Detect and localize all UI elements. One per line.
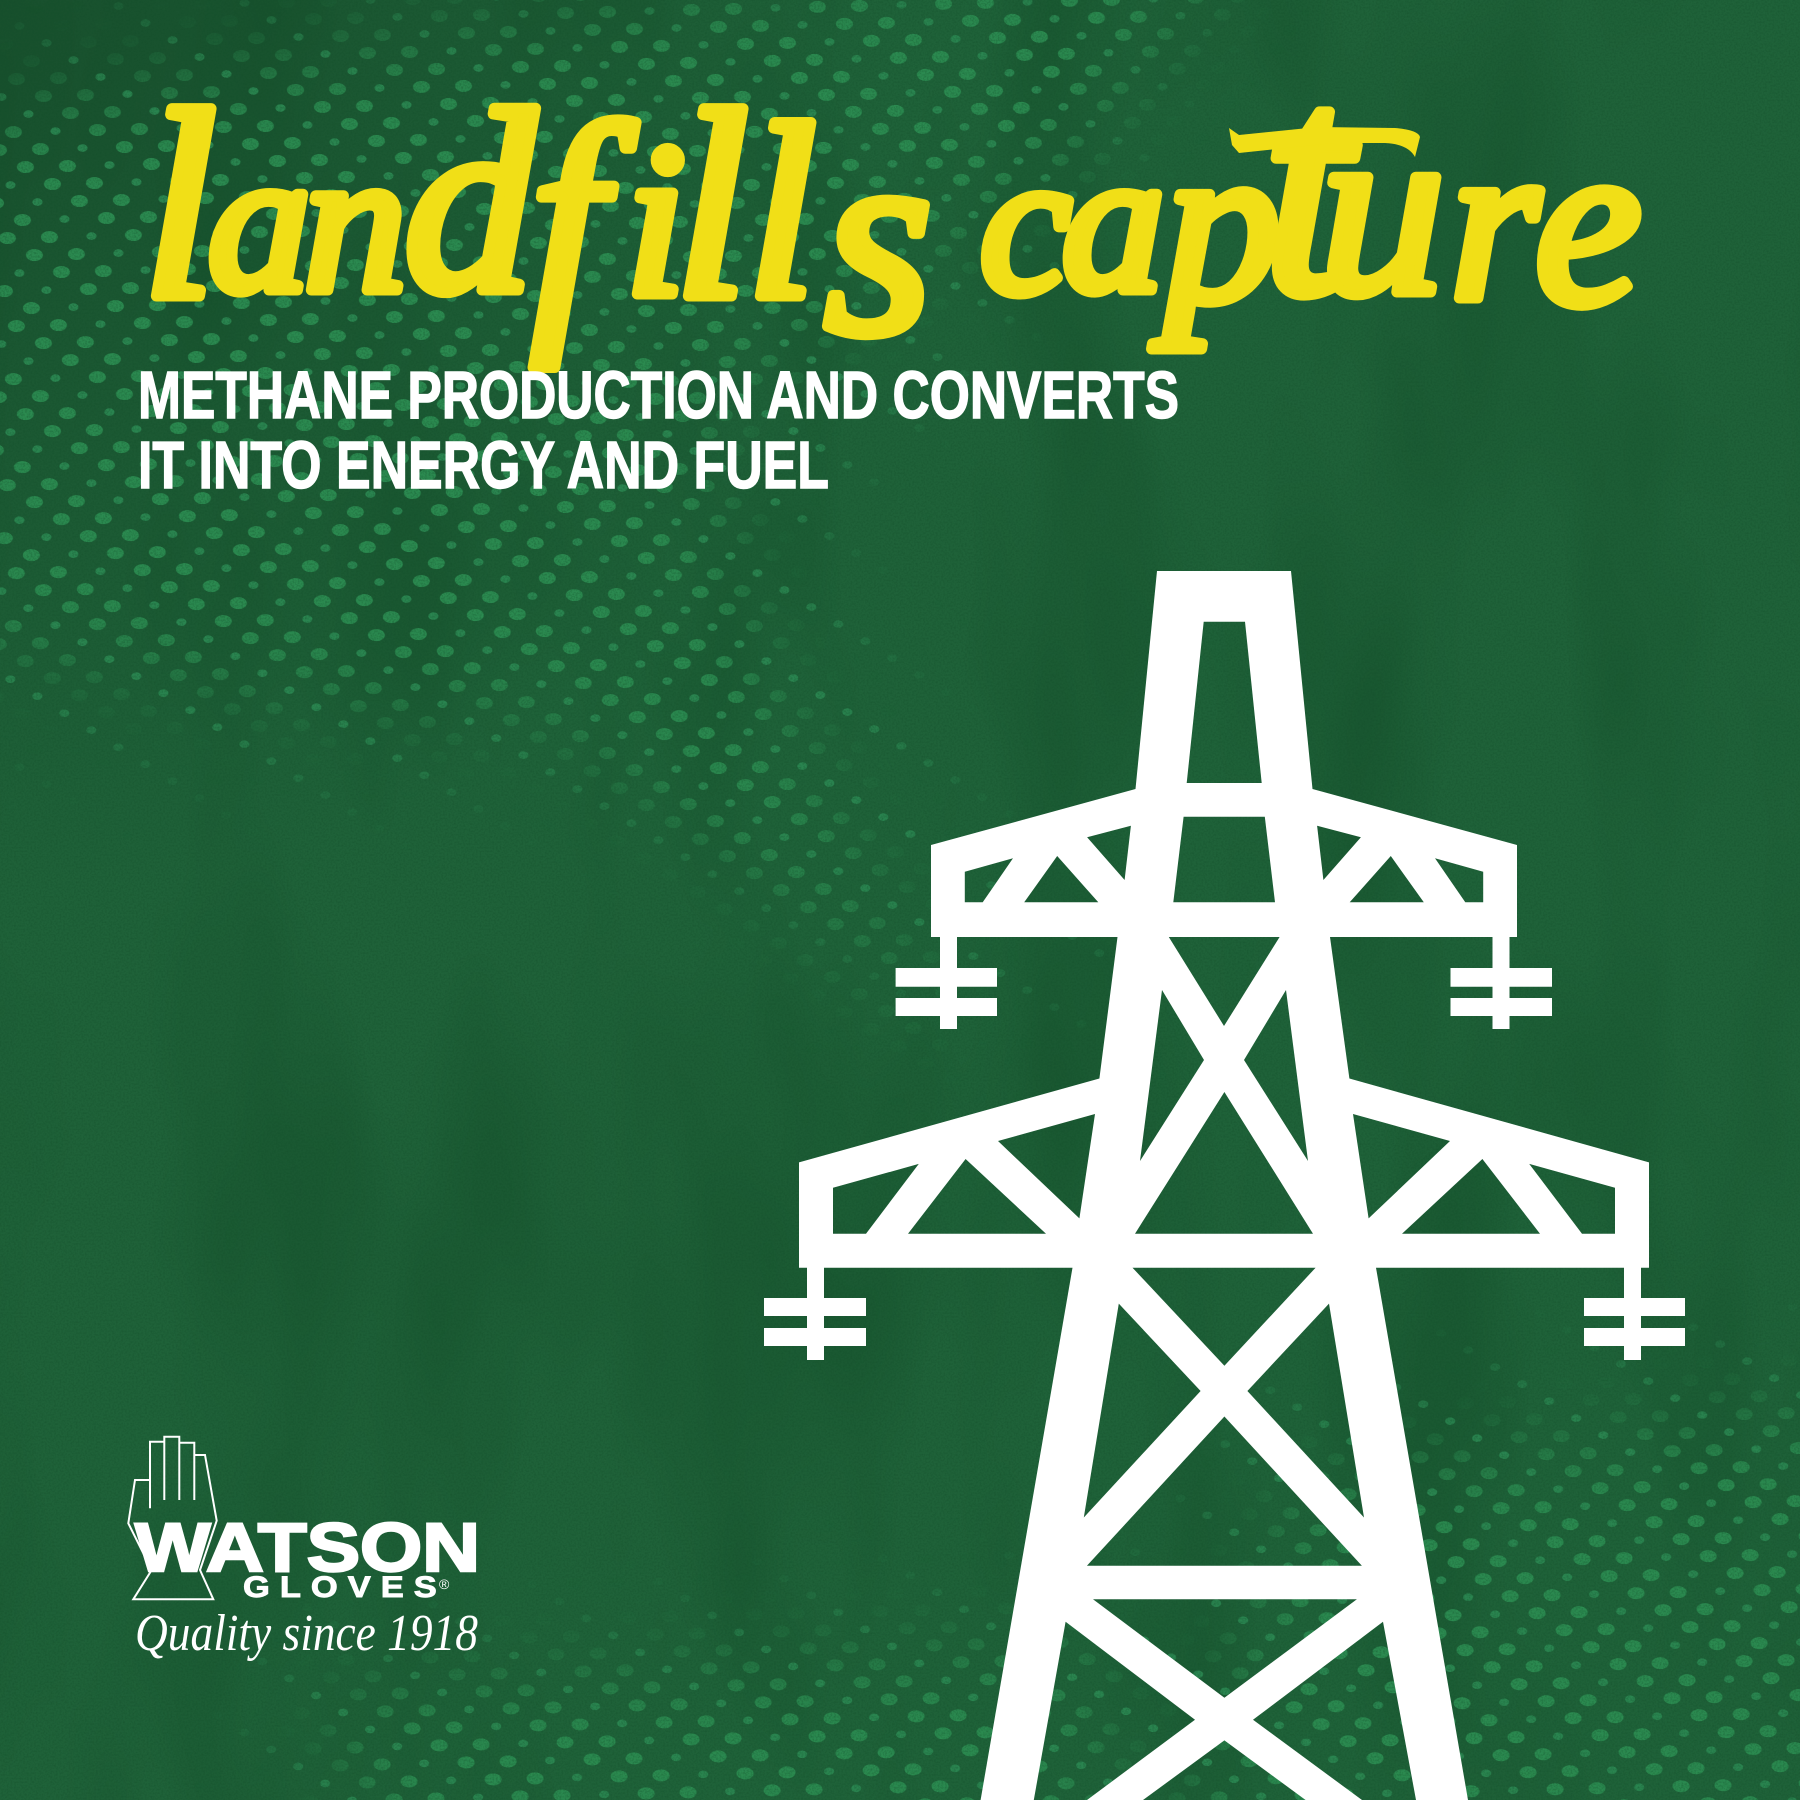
lower left insulator [764, 1267, 866, 1360]
title: landfills capture: d [404, 57, 539, 347]
title: landfills capture: t [1262, 8, 1362, 362]
title flourish: swash bar across the t [1229, 127, 1420, 157]
GLOVES wordmark: GLOVES [243, 1570, 447, 1603]
title: landfills capture: i [625, 98, 686, 342]
title: landfills capture: l [747, 74, 816, 351]
glove outline icon [128, 1437, 217, 1599]
title: landfills capture [142, 8, 1642, 393]
subtitle: IT INTO ENERGY AND FUEL [138, 428, 829, 503]
title: landfills capture: r [1450, 93, 1541, 348]
upper right insulator [1450, 936, 1552, 1029]
title: landfills capture: s [824, 82, 1003, 393]
title: landfills capture: e [1535, 89, 1642, 355]
icon: electricity pylon [764, 571, 1685, 1800]
subtitle [138, 358, 1179, 503]
WATSON wordmark: WATSON [135, 1509, 480, 1586]
title: landfills capture: n [304, 108, 406, 335]
tagline: Quality since 1918 [135, 1605, 478, 1662]
upper left insulator [896, 936, 997, 1029]
subtitle: METHANE PRODUCTION AND CONVERTS [138, 358, 1179, 433]
title: landfills capture: a [208, 108, 310, 335]
title: landfills capture: u [1320, 70, 1445, 347]
title: landfills capture: c [980, 110, 1071, 337]
lower right insulator [1584, 1267, 1685, 1360]
title: landfills capture: f [530, 70, 640, 369]
title: landfills capture: l [142, 56, 217, 355]
title: landfills capture: p [1151, 95, 1280, 350]
title: landfills capture: l [674, 56, 749, 355]
registered mark: ® [439, 1576, 450, 1592]
logo: Watson Gloves [128, 1437, 480, 1662]
title: landfills capture: a [1062, 108, 1164, 335]
